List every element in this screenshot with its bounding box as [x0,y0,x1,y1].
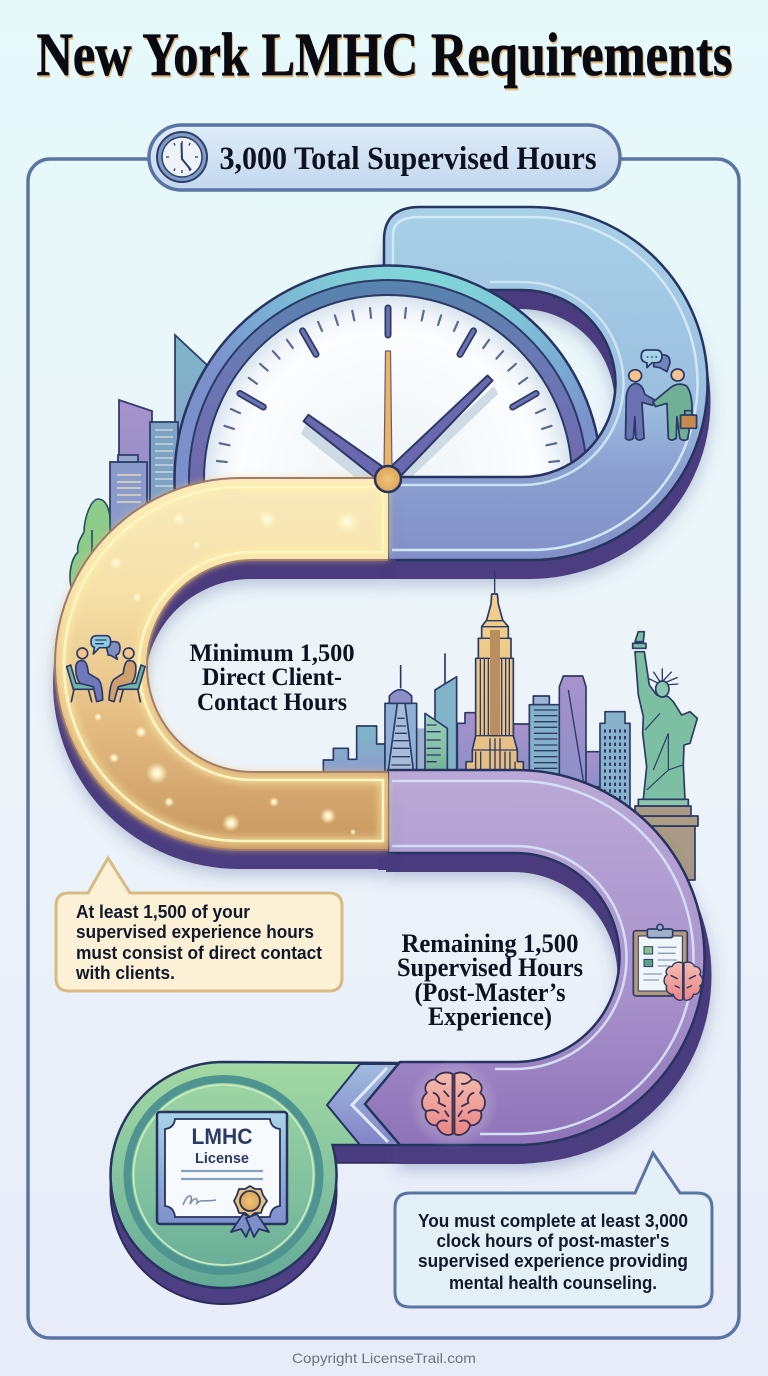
minor ticks [217,308,559,462]
callout: post-master's experience: supervised experience providing [418,1251,688,1271]
icon: banner clock [157,132,207,182]
clock [173,264,598,490]
clock hub [375,466,401,492]
central text: remaining hours: Supervised Hours [397,953,583,982]
central text: remaining hours: Experience) [428,1002,552,1031]
callout: post-master's experience: You must complete at least 3,000 [418,1211,688,1231]
sparkles [94,509,360,835]
central text: direct hours: Direct Client- [202,664,342,691]
statue of liberty [633,632,698,880]
dark base bar [333,1145,523,1163]
empire state building [466,570,523,770]
clock hands [304,376,492,485]
callout: post-master's experience: mental health counseling. [449,1273,657,1293]
ribbon seal [231,1186,269,1237]
central text: remaining hours: Remaining 1,500 [402,929,578,958]
arrow chevron [327,1064,398,1145]
callout: post-master's experience: clock hours of post-master's [436,1231,670,1251]
certificate: LMHC [192,1124,253,1149]
blue path front portion [396,400,708,562]
callout: direct contact: At least 1,500 of your [76,902,250,922]
left skyline [70,335,207,590]
purple path base [333,788,712,1164]
callout: direct contact [56,858,342,991]
small brain [664,962,703,1000]
callout: direct contact: supervised experience hours [76,922,314,942]
icon: clipboard and brain [633,924,703,1000]
central text: remaining hours: (Post-Master’s [414,978,566,1007]
icon: handshake [626,350,697,440]
icon: two people talking [67,636,145,702]
hand shadows [301,386,498,477]
golden path segment [53,478,396,870]
certificate: License [195,1150,249,1167]
frame [28,159,739,1338]
banner text: 3,000 Total Supervised Hours [220,141,597,177]
total hours banner [149,125,620,190]
license badge [110,1062,400,1304]
purple path surface [365,770,704,1145]
callout: post-master's experience [395,1153,712,1307]
tree [70,499,110,590]
copyright: Copyright LicenseTrail.com [292,1350,476,1366]
callout: direct contact: must consist of direct contact [76,943,322,963]
certificate [157,1112,287,1237]
central text: direct hours: Contact Hours [197,689,347,716]
major ticks [240,308,536,407]
callout: direct contact: with clients. [75,963,175,983]
central skyline [323,570,698,880]
dark joins under the path ends [378,559,396,870]
icon: brain [409,1060,498,1149]
blue path segment [383,207,710,579]
central text: direct hours [190,640,354,716]
central text: direct hours: Minimum 1,500 [190,640,354,667]
central text: remaining hours [397,929,583,1031]
